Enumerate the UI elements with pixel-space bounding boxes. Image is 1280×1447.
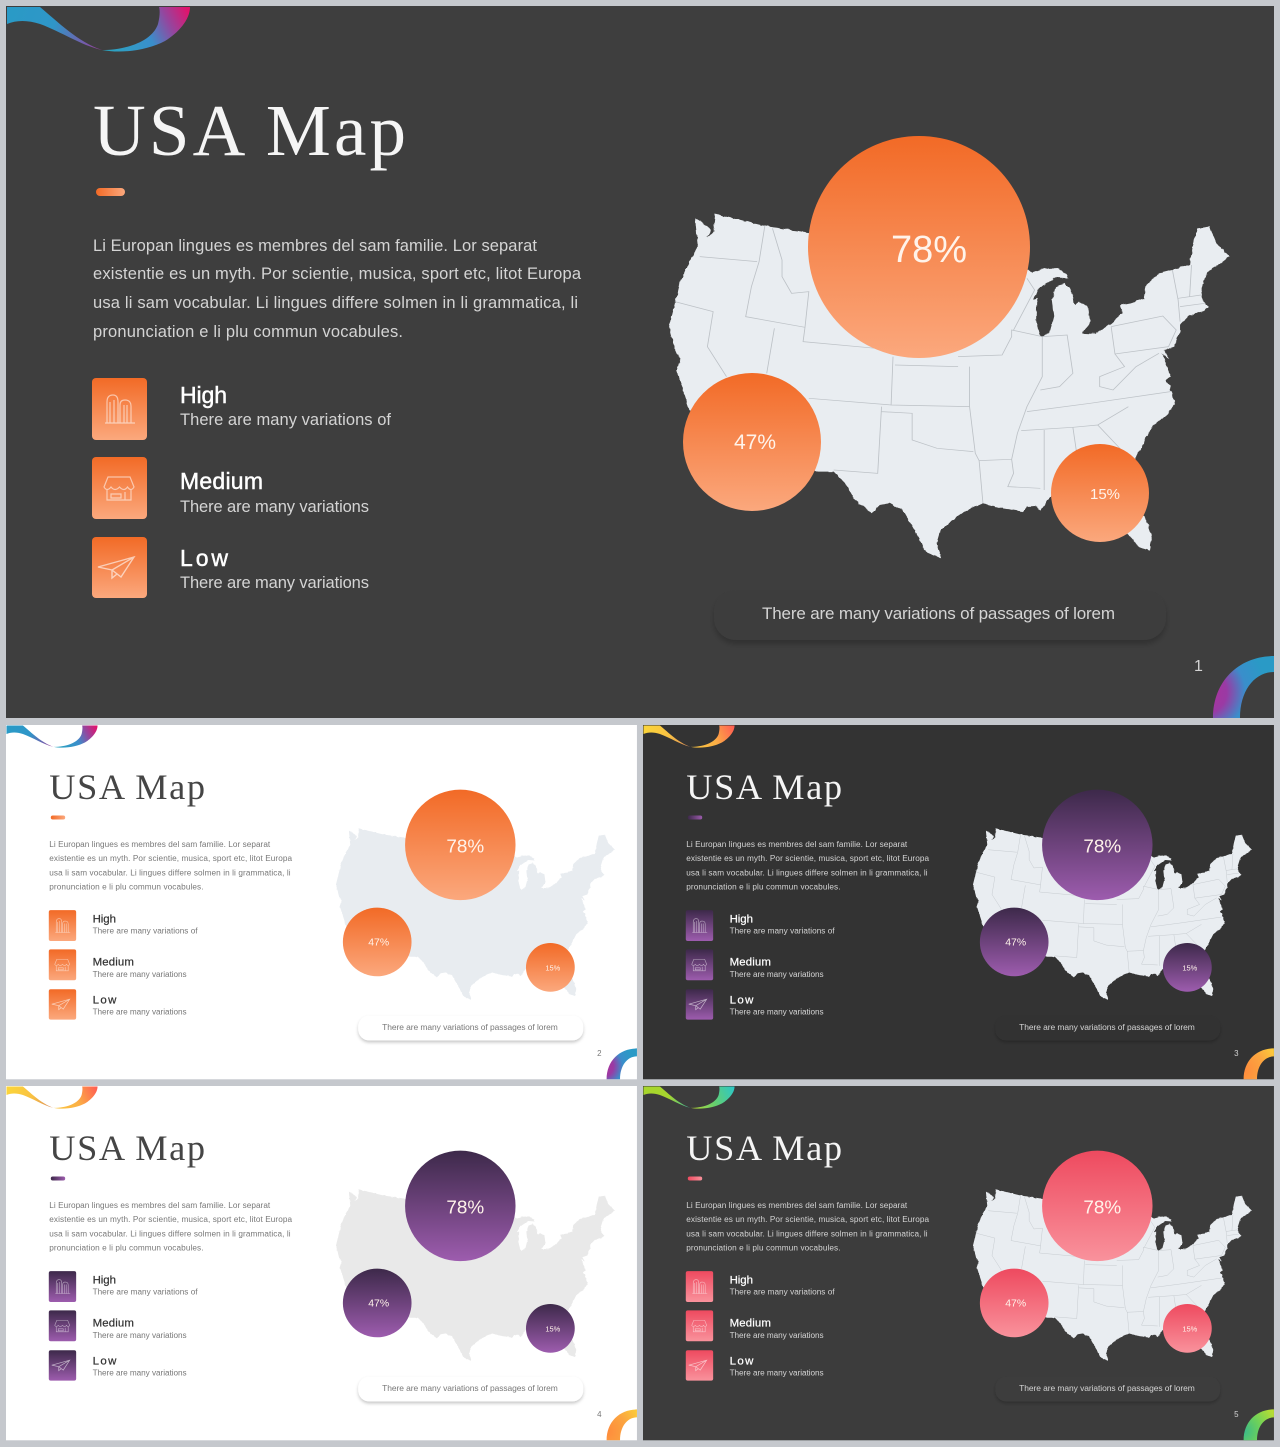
body text: pronunciation e li plu commun vocabules.	[93, 323, 403, 341]
legend: low	[49, 1350, 187, 1381]
bubble 15%: 15%	[1182, 1324, 1198, 1333]
body text: pronunciation e li plu commun vocabules.	[49, 1244, 204, 1253]
body text: usa li sam vocabular. Li lingues differe solmen in li grammatica, li	[93, 294, 578, 312]
corner arc	[1213, 656, 1274, 718]
body text: Li Europan lingues es membres del sam familie. Lor separat	[686, 840, 908, 849]
caption pill	[995, 1016, 1220, 1040]
bubble 15%	[1051, 444, 1149, 542]
legend: medium	[686, 949, 824, 980]
caption pill	[995, 1377, 1220, 1401]
legend: medium	[92, 457, 369, 519]
legend: low: There are many variations	[730, 1008, 824, 1017]
body text: usa li sam vocabular. Li lingues differe solmen in li grammatica, li	[49, 1229, 291, 1238]
legend: medium: Medium	[180, 468, 263, 494]
bubble 78%	[808, 136, 1030, 358]
legend: high	[686, 1271, 835, 1302]
bubble 78%	[405, 790, 516, 900]
legend: low	[49, 989, 187, 1020]
bubble 47%: 47%	[1005, 1298, 1026, 1309]
bubble 15%: 15%	[1182, 963, 1198, 972]
bubble 78%: 78%	[446, 836, 484, 857]
legend: low	[92, 537, 369, 598]
legend: medium: There are many variations	[730, 1331, 824, 1340]
bubble 47%: 47%	[368, 1298, 389, 1309]
title: USA Map	[686, 767, 842, 807]
legend: low	[686, 989, 824, 1020]
legend: high: High	[180, 382, 227, 408]
bubble 47%	[343, 908, 412, 976]
legend: medium: There are many variations	[93, 1331, 187, 1340]
legend: medium: There are many variations	[93, 970, 187, 979]
page number: 5	[1234, 1410, 1239, 1419]
legend: high: There are many variations of	[730, 926, 835, 935]
body text: Li Europan lingues es membres del sam familie. Lor separat	[686, 1201, 908, 1210]
body text: pronunciation e li plu commun vocabules.	[686, 1244, 841, 1253]
body text: Li Europan lingues es membres del sam familie. Lor separat	[49, 840, 271, 849]
bubble 15%	[1163, 1304, 1212, 1353]
page number: 1	[1194, 658, 1203, 675]
body text: Li Europan lingues es membres del sam familie. Lor separat	[49, 1201, 271, 1210]
bubble 47%	[980, 1269, 1049, 1337]
panel: slide 4 light purple	[6, 1086, 637, 1440]
body text: Li Europan lingues es membres del sam familie. Lor separat	[93, 237, 537, 255]
legend: medium: There are many variations	[180, 498, 369, 516]
legend: medium: Medium	[93, 956, 134, 968]
panel: slide 5 dark pink	[643, 1086, 1274, 1440]
accent bar	[96, 188, 125, 196]
caption pill: There are many variations of passages of lorem	[1019, 1383, 1195, 1393]
body text: existentie es un myth. Por scientie, musica, sport etc, litot Europa	[686, 854, 930, 863]
bubble 78%: 78%	[1083, 1197, 1121, 1218]
body text: existentie es un myth. Por scientie, musica, sport etc, litot Europa	[686, 1215, 930, 1224]
title: USA Map	[686, 1128, 842, 1168]
legend: low: There are many variations	[180, 574, 369, 592]
corner arc	[1244, 1409, 1274, 1440]
legend: high	[49, 910, 198, 941]
accent bar	[688, 816, 702, 820]
bubble 47%	[683, 373, 821, 511]
page number: 4	[597, 1410, 602, 1419]
body text: pronunciation e li plu commun vocabules.	[49, 883, 204, 892]
title: USA Map	[93, 90, 406, 171]
usa map	[669, 214, 1230, 558]
body text	[686, 840, 930, 892]
bubble 78%: 78%	[446, 1197, 484, 1218]
corner arc	[607, 1048, 637, 1079]
legend: low: Low	[180, 545, 228, 571]
body text	[49, 1201, 293, 1253]
body text	[49, 840, 293, 892]
usa map	[973, 1189, 1252, 1361]
caption pill: There are many variations of passages of lorem	[762, 604, 1115, 623]
bubble 47%: 47%	[1005, 937, 1026, 948]
bubble 47%: 47%	[734, 431, 776, 454]
legend: medium: Medium	[730, 956, 771, 968]
legend: high	[686, 910, 835, 941]
body text: usa li sam vocabular. Li lingues differe solmen in li grammatica, li	[686, 1229, 928, 1238]
body text	[93, 237, 582, 341]
title: USA Map	[49, 1128, 205, 1168]
corner arc	[1244, 1048, 1274, 1079]
body text: existentie es un myth. Por scientie, musica, sport etc, litot Europa	[93, 265, 582, 283]
bubble 78%: 78%	[891, 229, 967, 271]
usa map	[336, 1189, 615, 1361]
usa map	[336, 828, 615, 1000]
ribbon top left	[6, 1086, 98, 1109]
legend: low: Low	[93, 1356, 117, 1368]
accent bar	[51, 816, 65, 820]
caption pill	[358, 1377, 583, 1401]
legend: high: High	[730, 1275, 753, 1287]
body text: existentie es un myth. Por scientie, musica, sport etc, litot Europa	[49, 1215, 293, 1224]
accent bar	[51, 1177, 65, 1181]
legend: high: There are many variations of	[730, 1287, 835, 1296]
body text: pronunciation e li plu commun vocabules.	[686, 883, 841, 892]
caption pill	[358, 1016, 583, 1040]
legend: medium	[686, 1310, 824, 1341]
legend: low: Low	[93, 995, 117, 1007]
legend: high	[92, 378, 391, 440]
bubble 47%: 47%	[368, 937, 389, 948]
body text: usa li sam vocabular. Li lingues differe solmen in li grammatica, li	[49, 868, 291, 877]
legend: high: There are many variations of	[180, 411, 391, 429]
legend: high	[49, 1271, 198, 1302]
legend: low	[686, 1350, 824, 1381]
legend: high: There are many variations of	[93, 1287, 198, 1296]
legend: low: There are many variations	[93, 1008, 187, 1017]
bubble 78%	[1042, 1151, 1153, 1261]
legend: high: High	[93, 914, 116, 926]
legend: high: High	[730, 914, 753, 926]
bubble 47%	[980, 908, 1049, 976]
bubble 15%	[1163, 943, 1212, 992]
caption pill	[714, 590, 1166, 640]
legend: low: Low	[730, 1356, 754, 1368]
panel: slide 3 dark purple	[643, 725, 1274, 1079]
legend: low: There are many variations	[93, 1369, 187, 1378]
ribbon top left	[643, 1086, 735, 1109]
legend: medium: There are many variations	[730, 970, 824, 979]
bubble 15%: 15%	[545, 963, 561, 972]
legend: low: There are many variations	[730, 1369, 824, 1378]
legend: low: Low	[730, 995, 754, 1007]
caption pill: There are many variations of passages of lorem	[382, 1022, 558, 1032]
legend: medium	[49, 1310, 187, 1341]
panel: slide 1 dark orange	[6, 6, 1274, 718]
ribbon top left	[643, 725, 735, 748]
title: USA Map	[49, 767, 205, 807]
bubble 15%: 15%	[1090, 486, 1120, 503]
legend: medium: Medium	[93, 1317, 134, 1329]
panel: slide 2 light orange	[6, 725, 637, 1079]
legend: medium: Medium	[730, 1317, 771, 1329]
legend: high: High	[93, 1275, 116, 1287]
page number: 2	[597, 1049, 602, 1058]
legend: high: There are many variations of	[93, 926, 198, 935]
caption pill: There are many variations of passages of lorem	[1019, 1022, 1195, 1032]
caption pill: There are many variations of passages of lorem	[382, 1383, 558, 1393]
body text	[686, 1201, 930, 1253]
bubble 15%	[526, 1304, 575, 1353]
bubble 15%: 15%	[545, 1324, 561, 1333]
bubble 78%: 78%	[1083, 836, 1121, 857]
bubble 78%	[405, 1151, 516, 1261]
accent bar	[688, 1177, 702, 1181]
bubble 47%	[343, 1269, 412, 1337]
body text: existentie es un myth. Por scientie, musica, sport etc, litot Europa	[49, 854, 293, 863]
ribbon top left	[6, 725, 98, 748]
bubble 78%	[1042, 790, 1153, 900]
ribbon top left	[7, 7, 190, 52]
corner arc	[607, 1409, 637, 1440]
usa map	[973, 828, 1252, 1000]
page number: 3	[1234, 1049, 1239, 1058]
legend: medium	[49, 949, 187, 980]
bubble 15%	[526, 943, 575, 992]
body text: usa li sam vocabular. Li lingues differe solmen in li grammatica, li	[686, 868, 928, 877]
